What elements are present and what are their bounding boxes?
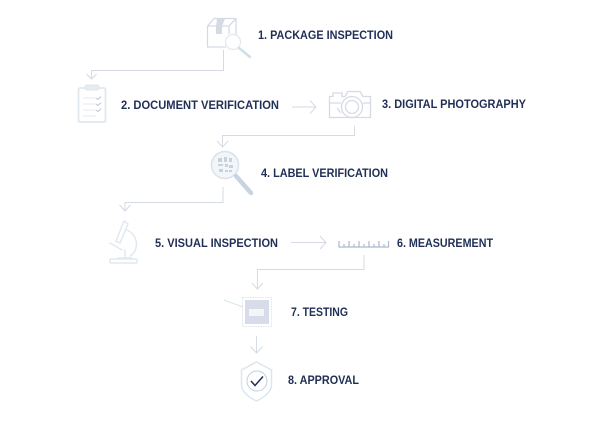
icon: shield with check <box>242 362 272 401</box>
icon: clipboard checklist <box>78 85 106 122</box>
step 8 label: 8. APPROVAL <box>288 375 359 387</box>
arrow: step 7 to 8 <box>250 336 262 353</box>
icon: camera <box>330 92 370 118</box>
arrow: step 5 to 6 <box>291 236 326 249</box>
icon: package with magnifier <box>208 18 250 57</box>
step 2 label: 2. DOCUMENT VERIFICATION <box>121 100 279 112</box>
step 7 label: 7. TESTING <box>291 307 348 319</box>
arrow: step 2 to 3 <box>292 100 316 114</box>
step 3 label: 3. DIGITAL PHOTOGRAPHY <box>382 99 526 111</box>
icon: microscope <box>110 221 137 263</box>
connector: step 6 to 7 <box>252 255 364 289</box>
connector: step 1 to 2 <box>86 50 224 79</box>
icon: test chip with probe <box>224 298 272 326</box>
step 5 label: 5. VISUAL INSPECTION <box>155 238 278 250</box>
icon: ruler <box>338 241 389 247</box>
connector: step 3 to 4 <box>217 126 354 147</box>
step 1 label: 1. PACKAGE INSPECTION <box>258 30 393 42</box>
step 4 label: 4. LABEL VERIFICATION <box>261 168 388 180</box>
icon: magnifier over QR label <box>212 152 251 193</box>
connector: step 4 to 5 <box>120 187 223 211</box>
step 6 label: 6. MEASUREMENT <box>397 238 493 250</box>
